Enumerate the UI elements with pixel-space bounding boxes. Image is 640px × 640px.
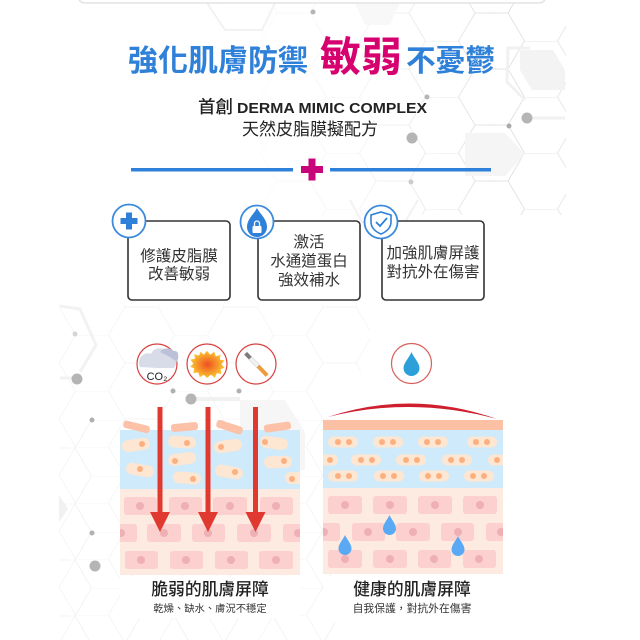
arch xyxy=(328,403,497,419)
lower skin layer xyxy=(120,489,300,575)
caption: healthy barrier xyxy=(323,576,503,618)
top layer xyxy=(323,420,503,430)
icon: plus xyxy=(112,204,146,238)
panel: repair xyxy=(112,204,230,300)
chart: fragile skin barrier xyxy=(120,407,300,575)
text: repair: 改善敏弱 xyxy=(148,265,210,283)
subtitle: 首創 xyxy=(198,97,233,117)
text: hydrate: 激活 xyxy=(293,233,325,251)
subtitle: 天然皮脂膜擬配方 xyxy=(242,120,378,139)
icon: CO2 cloud: CO₂ xyxy=(147,371,167,383)
subtitle xyxy=(198,97,427,139)
blue skin layer xyxy=(323,430,503,488)
blue skin layer xyxy=(120,430,300,489)
arrows xyxy=(150,407,266,532)
divider with plus xyxy=(131,158,491,180)
healthy cells xyxy=(323,436,503,568)
flakes xyxy=(123,419,291,435)
title xyxy=(128,34,495,80)
icon: water drop lock xyxy=(240,206,274,238)
chart: healthy skin barrier xyxy=(323,404,503,574)
icon: shield xyxy=(364,206,398,238)
panel: hydrate xyxy=(240,206,360,300)
background: top hexagon pattern xyxy=(200,3,566,222)
caption: healthy barrier: 健康的肌膚屏障 xyxy=(353,579,471,599)
icon: cigarette xyxy=(236,344,276,384)
title: 不憂鬱 xyxy=(406,45,495,78)
text: hydrate: 強效補水 xyxy=(278,271,340,289)
water drops xyxy=(338,515,464,556)
caption: fragile barrier xyxy=(120,576,300,618)
text: protect: 加強肌膚屏護 xyxy=(386,244,480,262)
title: 強化肌膚防禦 xyxy=(128,45,308,78)
title: 敏弱 xyxy=(320,34,402,80)
text: protect xyxy=(386,244,480,281)
damaged cells xyxy=(120,436,300,569)
text: repair xyxy=(140,247,218,283)
text: hydrate: 水通道蛋白 xyxy=(270,252,348,270)
lower skin layer xyxy=(323,488,503,574)
icon: sun xyxy=(187,344,227,384)
text: repair: 修護皮脂膜 xyxy=(140,247,218,265)
top card edge xyxy=(78,0,546,3)
subtitle: DERMA MIMIC COMPLEX xyxy=(237,101,427,117)
panel: protect xyxy=(364,206,484,300)
background: bottom hexagon pattern xyxy=(59,305,370,640)
caption: healthy barrier: 自我保護，對抗外在傷害 xyxy=(353,601,472,615)
caption: fragile barrier: 乾燥、缺水、膚況不穩定 xyxy=(153,602,267,615)
text: hydrate xyxy=(270,233,348,289)
text: protect: 對抗外在傷害 xyxy=(386,263,480,281)
icon: CO2 cloud xyxy=(137,344,178,384)
caption: fragile barrier: 脆弱的肌膚屏障 xyxy=(151,580,269,599)
icon: water drop xyxy=(392,344,432,384)
